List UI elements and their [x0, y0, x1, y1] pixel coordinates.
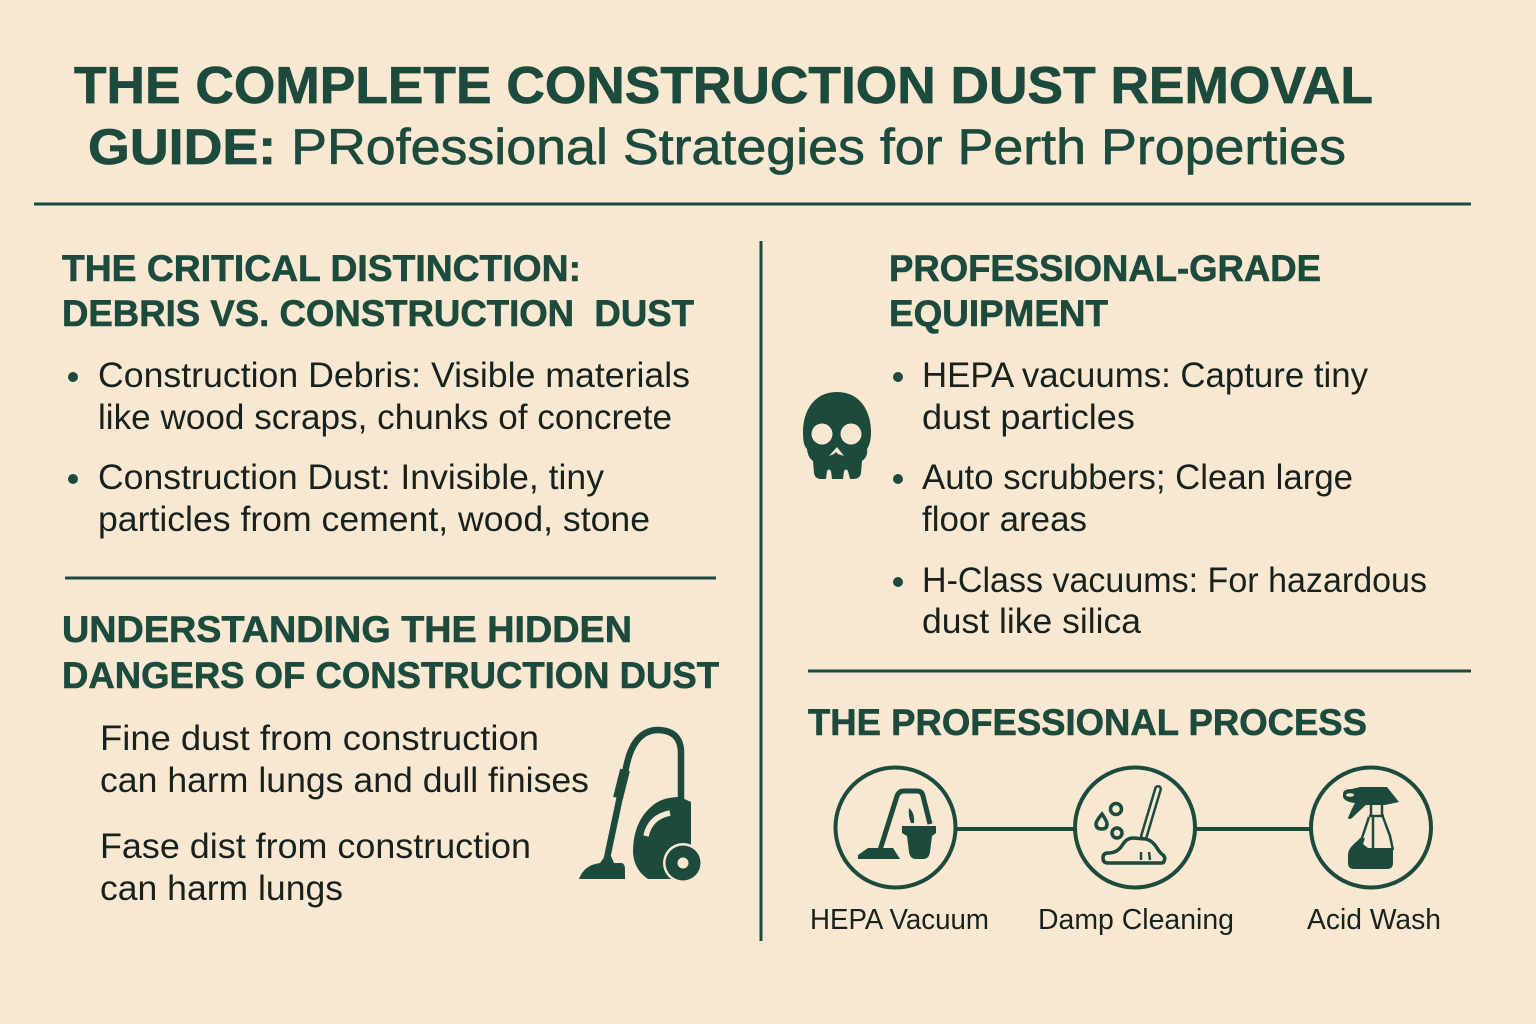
label: acid wash: Acid Wash: [1307, 904, 1441, 936]
heading: critical distinction: [62, 248, 694, 334]
heading: hidden dangers: [62, 609, 719, 696]
heading: critical distinction: THE CRITICAL DISTINCTION:: [62, 248, 581, 289]
heading: equipment: PROFESSIONAL-GRADE: [889, 248, 1321, 289]
icon: HEPA vacuum: [836, 768, 956, 888]
bullet: construction debris: like wood scraps, chunks of concrete: [98, 398, 672, 437]
heading: equipment: [889, 248, 1321, 334]
bullet: construction debris: [68, 356, 690, 437]
panel: professional-grade equipment: [889, 248, 1427, 641]
bullet: auto scrubbers: [893, 458, 1353, 539]
bullet: HEPA vacuums: HEPA vacuums: Capture tiny: [922, 356, 1368, 395]
title: [74, 57, 1373, 175]
panel: critical distinction: [62, 248, 694, 539]
icon: vacuum cleaner: [579, 730, 703, 883]
heading: hidden dangers: UNDERSTANDING THE HIDDEN: [62, 609, 632, 650]
bullet: HEPA vacuums: dust particles: [922, 398, 1135, 437]
title: THE COMPLETE CONSTRUCTION DUST REMOVAL: [74, 57, 1373, 115]
text: fase dist: Fase dist from construction: [100, 827, 531, 866]
text: fase dist: can harm lungs: [100, 869, 343, 908]
connector: step 2 to step 3: [1196, 827, 1310, 831]
bullet: construction dust: Construction Dust: Invisible, tiny: [98, 458, 605, 497]
panel: hidden dangers: [62, 609, 719, 908]
bullet: H-class vacuums: H-Class vacuums: For hazardous: [922, 561, 1427, 600]
text: fine dust: [100, 719, 589, 800]
heading: process: THE PROFESSIONAL PROCESS: [808, 702, 1367, 743]
heading: critical distinction: DEBRIS VS. CONSTRUCTION DUST: [62, 293, 694, 334]
bullet: H-class vacuums: dust like silica: [922, 602, 1142, 641]
heading: equipment: EQUIPMENT: [889, 293, 1108, 334]
text: fine dust: Fine dust from construction: [100, 719, 539, 758]
bullet: construction dust: [68, 458, 650, 539]
text: fase dist: [100, 827, 531, 908]
title: GUIDE: PRofessional Strategies for Perth Properties: [88, 119, 1346, 175]
text: fine dust: can harm lungs and dull finises: [100, 761, 589, 800]
bullet: auto scrubbers: Auto scrubbers; Clean large: [922, 458, 1353, 497]
label: HEPA vacuum: HEPA Vacuum: [810, 904, 989, 936]
bullet: HEPA vacuums: [893, 356, 1368, 437]
icon: skull: [803, 392, 871, 479]
icon: damp cleaning: [1075, 768, 1195, 888]
bullet: H-class vacuums: [893, 561, 1427, 641]
icon: acid wash spray bottle: [1311, 768, 1431, 888]
panel: professional process: [808, 702, 1441, 936]
label: damp cleaning: Damp Cleaning: [1038, 904, 1234, 936]
heading: hidden dangers: DANGERS OF CONSTRUCTION DUST: [62, 655, 719, 696]
bullet: construction debris: Construction Debris: Visible materials: [98, 356, 690, 395]
bullet: auto scrubbers: floor areas: [922, 500, 1087, 539]
connector: step 1 to step 2: [956, 827, 1074, 831]
bullet: construction dust: particles from cement, wood, stone: [98, 500, 650, 539]
